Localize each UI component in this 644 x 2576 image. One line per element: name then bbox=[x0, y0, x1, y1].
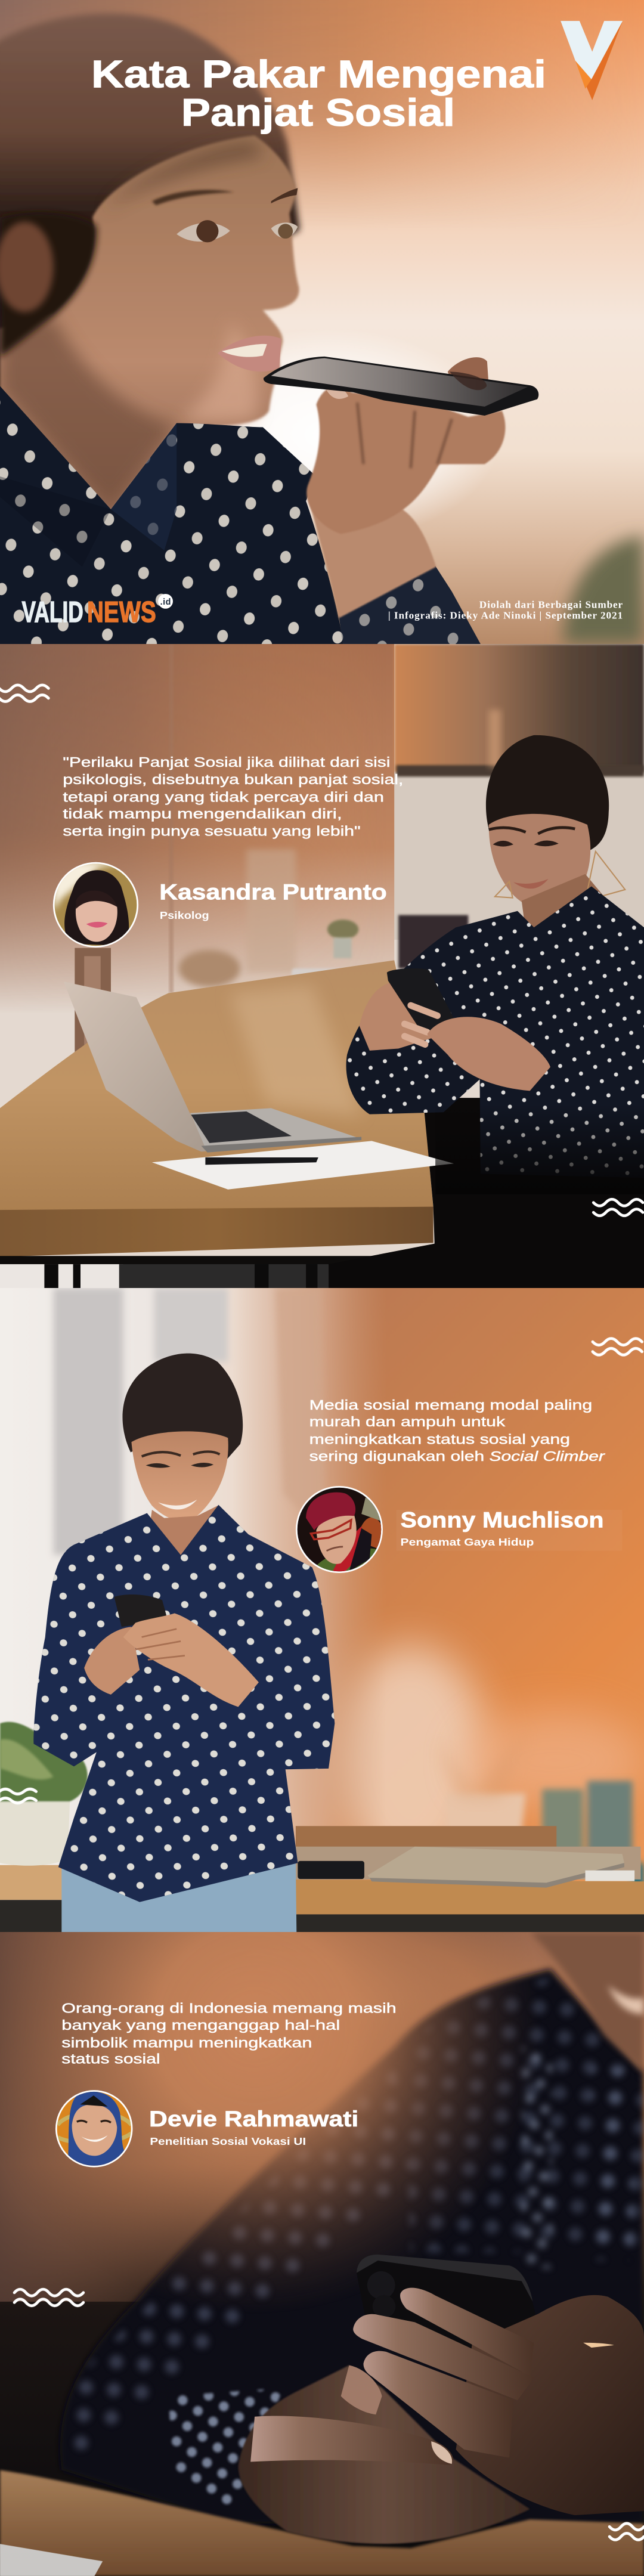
panel: Sonny Muchlison quote bbox=[0, 1288, 644, 1932]
quote text: status sosial bbox=[61, 2051, 160, 2066]
photo: table and laptop bbox=[0, 2470, 644, 2576]
icon: wave right bbox=[593, 1199, 643, 1216]
name and role: Devie Rahmawati: Penelitian Sosial Vokasi UI bbox=[150, 2135, 306, 2147]
quote text: Orang-orang di Indonesia memang masih bbox=[61, 2001, 397, 2016]
quote text: murah dan ampuh untuk bbox=[309, 1414, 506, 1429]
name and role: Kasandra Putranto: Kasandra Putranto bbox=[159, 879, 387, 904]
quote text: sering digunakan oleh Social Climber bbox=[309, 1448, 605, 1464]
quote text bbox=[61, 2001, 397, 2066]
photo: woman with hair and face bbox=[0, 14, 300, 512]
name and role: Kasandra Putranto: Psikolog bbox=[160, 909, 209, 921]
credits text bbox=[388, 599, 623, 621]
quote text: simbolik mampu meningkatkan bbox=[61, 2035, 312, 2051]
photo: wooden table bbox=[0, 960, 452, 1288]
quote text: serta ingin punya sesuatu yang lebih" bbox=[63, 823, 361, 839]
name and role: Sonny Muchlison: Sonny Muchlison bbox=[401, 1507, 604, 1532]
panel: Devie Rahmawati quote bbox=[0, 1932, 644, 2576]
photo: blurred shirt with dots bbox=[0, 1932, 644, 2524]
panel: intro cover with woman speaking into phone bbox=[0, 0, 644, 644]
logo: VALIDNEWS.id wordmark bbox=[22, 594, 173, 628]
quote text: tidak mampu mengendalikan diri, bbox=[63, 806, 342, 822]
quote text: psikologis, disebutnya bukan panjat sosial, bbox=[63, 772, 403, 787]
avatar: Sonny Muchlison bbox=[296, 1485, 384, 1574]
photo: polka dot shirt bbox=[0, 386, 481, 644]
quote text: Media sosial memang modal paling bbox=[309, 1397, 592, 1413]
photo: smartphone bbox=[264, 357, 538, 416]
background: kitchen wall with orange overlay bbox=[0, 644, 644, 1288]
icon: wave left bbox=[0, 685, 48, 701]
quote text: banyak yang menganggap hal-hal bbox=[61, 2017, 340, 2033]
credits text: Diolah dari Berbagai Sumber bbox=[479, 599, 623, 610]
title bbox=[91, 52, 546, 134]
photo: dark lower right foreground bbox=[329, 1098, 644, 1288]
photo: laptop and paper with pen bbox=[64, 982, 454, 1190]
quote text: "Perilaku Panjat Sosial jika dilihat dari sisi bbox=[63, 754, 390, 770]
icon: wave left over plant bbox=[0, 1789, 36, 1803]
name and role: Sonny Muchlison bbox=[397, 1507, 622, 1551]
credits text: | Infografis: Dieky Ade Ninoki | September 2021 bbox=[388, 609, 623, 621]
quote text: tetapi orang yang tidak percaya diri dan bbox=[63, 789, 384, 804]
icon: wave top right bbox=[593, 1339, 642, 1355]
avatar: Devie Rahmawati bbox=[55, 2090, 134, 2168]
photo: standing woman with phone bbox=[33, 1354, 335, 1932]
logo: VALIDNEWS.id wordmark: VALID bbox=[22, 595, 83, 628]
icon: Validnews V logo bbox=[561, 21, 623, 100]
background: curtains with orange gradient bbox=[0, 1288, 644, 1932]
background: orange to cream gradient bbox=[0, 0, 644, 644]
avatar: Kasandra Putranto bbox=[53, 862, 140, 948]
background: orange fading to dark bbox=[0, 1895, 644, 2576]
name and role: Devie Rahmawati: Devie Rahmawati bbox=[149, 2106, 358, 2131]
logo: VALIDNEWS.id wordmark: NEWS bbox=[87, 595, 156, 628]
photo: desk with laptop, plant and pot bbox=[0, 1722, 644, 1932]
photo: arm and hand holding phone bbox=[306, 357, 505, 618]
photo: hands holding phone bbox=[238, 2255, 644, 2544]
title: Kata Pakar Mengenai bbox=[91, 52, 546, 96]
icon: wave left bbox=[14, 2289, 83, 2306]
name and role: Kasandra Putranto bbox=[159, 879, 387, 921]
quote text: meningkatkan status sosial yang bbox=[309, 1432, 570, 1447]
icon: wave bottom right bbox=[609, 2524, 644, 2540]
title: Panjat Sosial bbox=[181, 91, 455, 134]
photo: woman with phone bbox=[346, 735, 644, 1194]
quote text bbox=[63, 754, 403, 839]
logo: VALIDNEWS.id wordmark: .id bbox=[160, 597, 171, 607]
quote text bbox=[309, 1397, 605, 1464]
name and role: Devie Rahmawati bbox=[149, 2106, 358, 2147]
panel: Kasandra Putranto quote bbox=[0, 644, 644, 1288]
name and role: Sonny Muchlison: Pengamat Gaya Hidup bbox=[401, 1536, 534, 1548]
